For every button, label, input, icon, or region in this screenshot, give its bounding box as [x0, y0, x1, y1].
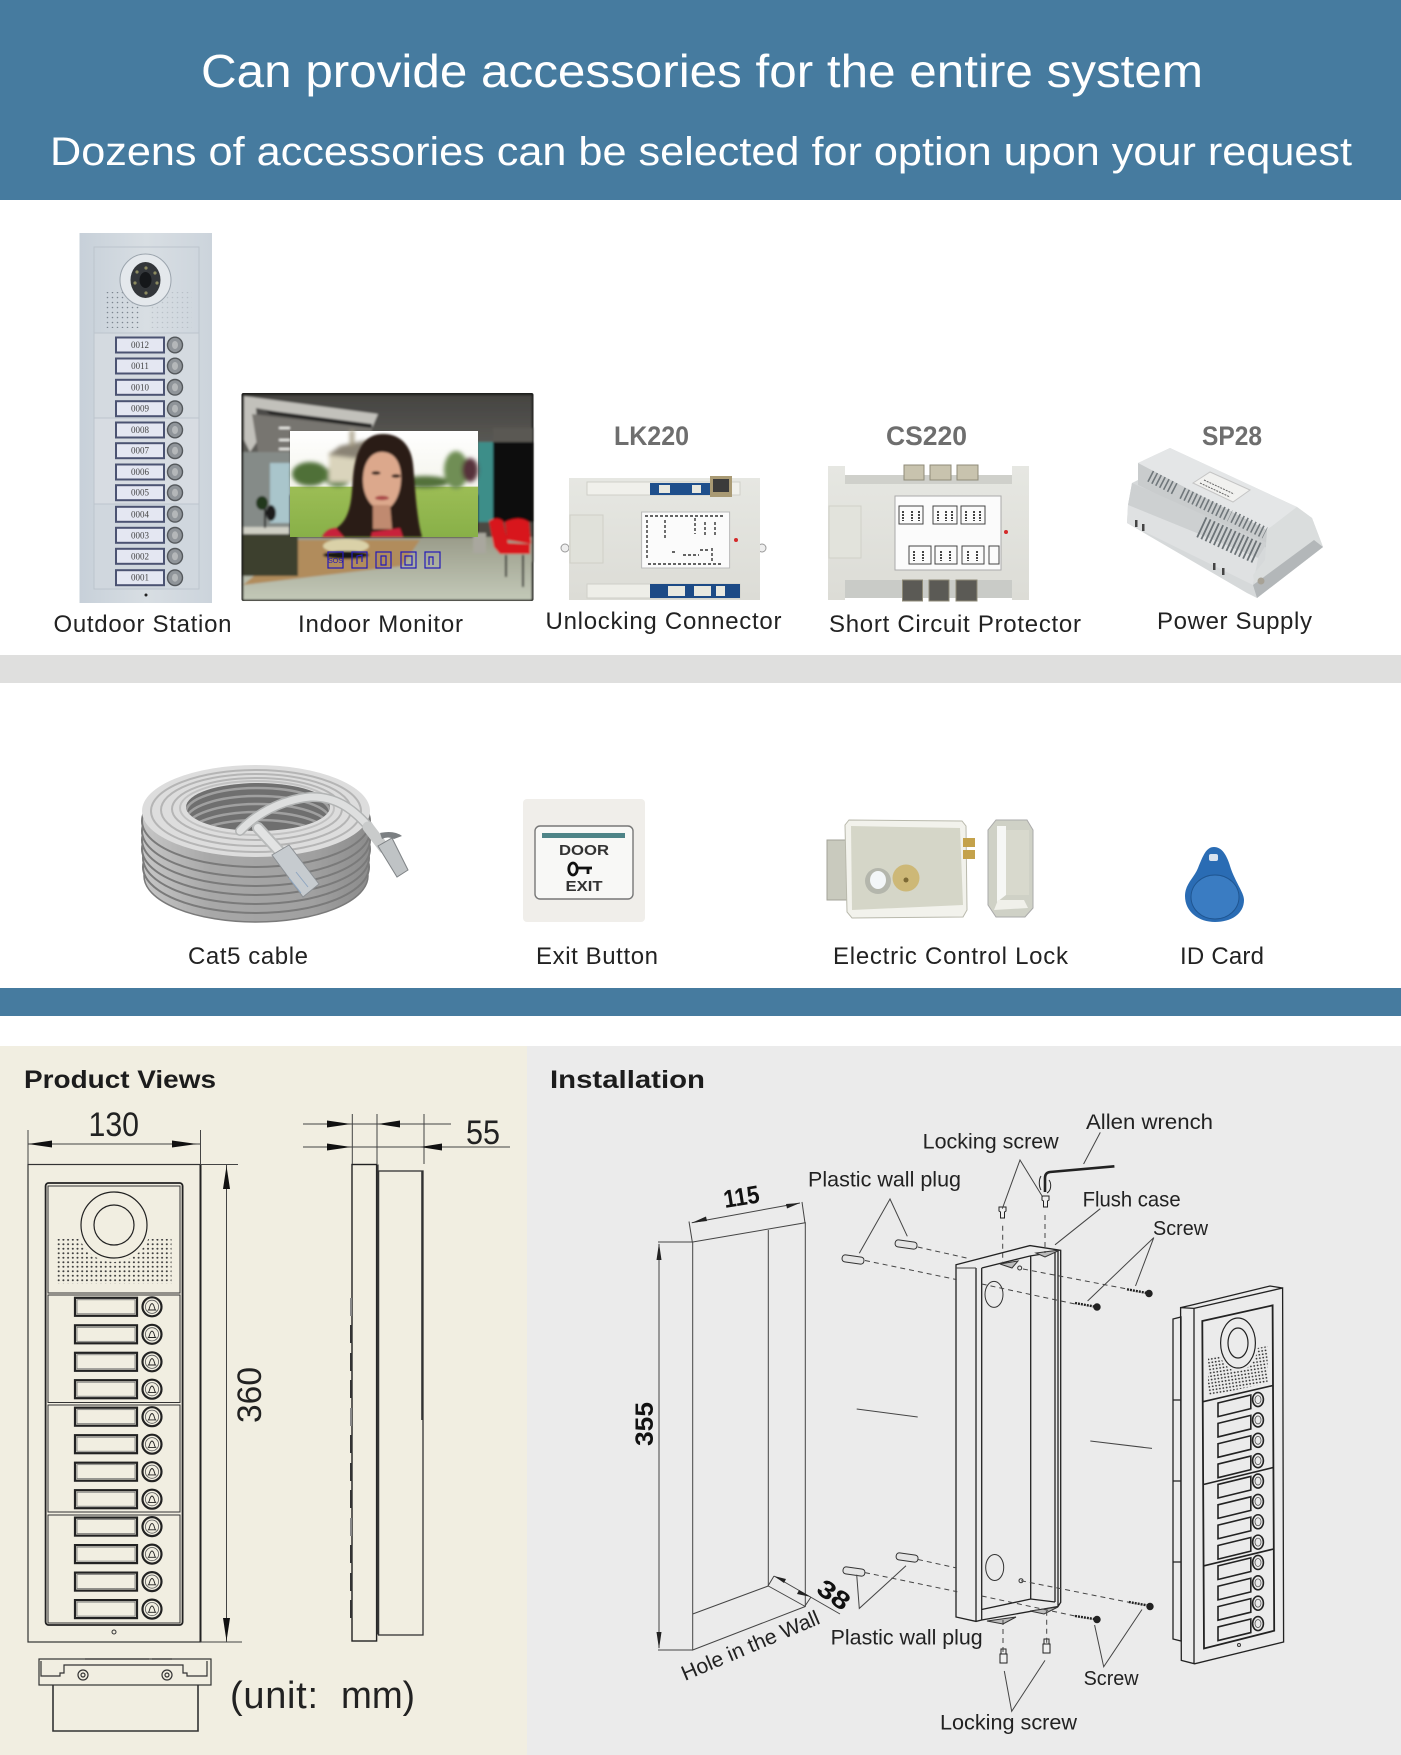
bottom view drawing	[39, 1659, 211, 1731]
dimension: 38	[768, 1574, 856, 1616]
product: exit button: DOOR	[559, 843, 610, 859]
panel: product views	[0, 1046, 527, 1755]
label: hole in the wall: Hole in the Wall	[678, 1607, 823, 1686]
product: outdoor station	[80, 233, 212, 603]
label: unlocking connector: Unlocking Connector	[546, 608, 782, 635]
stray alignment marks	[857, 1409, 1152, 1448]
call buttons and name tags: 0011	[131, 361, 149, 371]
product: unlocking connector	[561, 476, 766, 600]
label: electric control lock: Electric Control Lock	[833, 943, 1069, 970]
call buttons and name tags	[116, 337, 182, 586]
plastic wall plugs	[842, 1240, 918, 1576]
wall hole drawing	[631, 1181, 856, 1686]
product: exit button	[523, 799, 645, 922]
model: SP28: SP28	[1202, 421, 1262, 451]
unit note: mm)	[341, 1675, 415, 1717]
dimension: height 360: 360	[231, 1367, 269, 1423]
product: cat5 cable	[142, 765, 408, 922]
subtitle: Dozens of accessories can be selected for option upon your request	[50, 130, 1352, 174]
photo: visitor on screen	[290, 430, 478, 537]
label: power supply: Power Supply	[1157, 608, 1312, 635]
product: short circuit protector	[828, 465, 1029, 601]
lock strike plate	[988, 820, 1033, 917]
label: locking screw (top): Locking screw	[923, 1130, 1060, 1154]
title: Can provide accessories for the entire system	[201, 45, 1203, 97]
call buttons and name tags: 0006	[131, 467, 150, 477]
dimension: depth 55: 55	[466, 1114, 500, 1152]
dimension: 115	[689, 1181, 805, 1242]
call buttons and name tags: 0004	[131, 509, 150, 519]
dimension: height 360	[200, 1164, 269, 1642]
model: LK220: LK220	[614, 421, 689, 451]
label: outdoor station: Outdoor Station	[54, 611, 232, 638]
label: id card: ID Card	[1180, 943, 1264, 970]
flush case drawing	[956, 1246, 1061, 1624]
side view drawing	[350, 1164, 423, 1641]
product: indoor monitor	[242, 393, 534, 601]
label: allen wrench: Allen wrench	[1086, 1111, 1213, 1134]
unit note: (unit:	[230, 1675, 318, 1717]
label: indoor monitor: Indoor Monitor	[298, 611, 463, 638]
product: power supply	[1127, 448, 1323, 598]
call buttons and name tags: 0007	[131, 446, 150, 456]
icon: key	[569, 863, 592, 875]
dimension: 38: 38	[812, 1574, 856, 1616]
label: locking screw (bottom): Locking screw	[940, 1712, 1078, 1734]
label: screw (top): Screw	[1153, 1218, 1209, 1240]
label: flush case: Flush case	[1083, 1189, 1181, 1212]
dimension: width 130: 130	[88, 1106, 139, 1144]
patch cord with connectors	[240, 797, 384, 852]
dimension: width 130	[28, 1106, 200, 1164]
call buttons and name tags: 0009	[131, 404, 150, 414]
call buttons and name tags: 0003	[131, 530, 150, 540]
dimension: 115: 115	[722, 1181, 762, 1214]
on-screen icons: SOS	[328, 558, 343, 565]
assembled door station drawing	[1173, 1286, 1284, 1664]
product: exit button: EXIT	[566, 879, 603, 895]
label: plastic wall plug (top): Plastic wall plug	[808, 1169, 961, 1192]
product: electric control lock	[827, 820, 1033, 918]
panel: installation	[527, 1046, 1401, 1755]
label: cat5 cable: Cat5 cable	[188, 943, 308, 970]
label: exit button: Exit Button	[536, 943, 658, 970]
dimension: 355: 355	[631, 1402, 659, 1446]
heading: product views: Product Views	[24, 1066, 216, 1094]
heading: installation: Installation	[550, 1066, 705, 1094]
label: plastic wall plug (bottom): Plastic wall plug	[831, 1627, 983, 1650]
dimension: depth 55	[303, 1114, 510, 1164]
unit note	[230, 1675, 415, 1717]
dimension: 355	[631, 1242, 693, 1650]
header banner	[0, 0, 1401, 200]
call buttons and name tags: 0002	[131, 551, 149, 561]
label: short circuit protector: Short Circuit Protector	[829, 611, 1081, 638]
divider band: grey	[0, 655, 1401, 683]
front view drawing	[28, 1164, 200, 1642]
label: screw (bottom): Screw	[1084, 1668, 1139, 1690]
screws	[1075, 1289, 1153, 1623]
locking screws	[999, 1196, 1050, 1663]
call buttons and name tags: 0012	[131, 340, 149, 350]
dashed assembly guides	[865, 1215, 1129, 1654]
on-screen icons	[328, 552, 440, 568]
call buttons and name tags: 0010	[131, 382, 150, 392]
divider band: blue	[0, 988, 1401, 1016]
icon: camera	[120, 254, 171, 306]
model: CS220: CS220	[886, 421, 967, 451]
leader lines	[857, 1132, 1154, 1711]
icon: allen wrench	[1039, 1166, 1114, 1193]
call buttons and name tags: 0005	[131, 488, 150, 498]
product: id card	[1185, 847, 1244, 922]
call buttons and name tags: 0008	[131, 425, 150, 435]
call buttons and name tags: 0001	[131, 573, 149, 583]
